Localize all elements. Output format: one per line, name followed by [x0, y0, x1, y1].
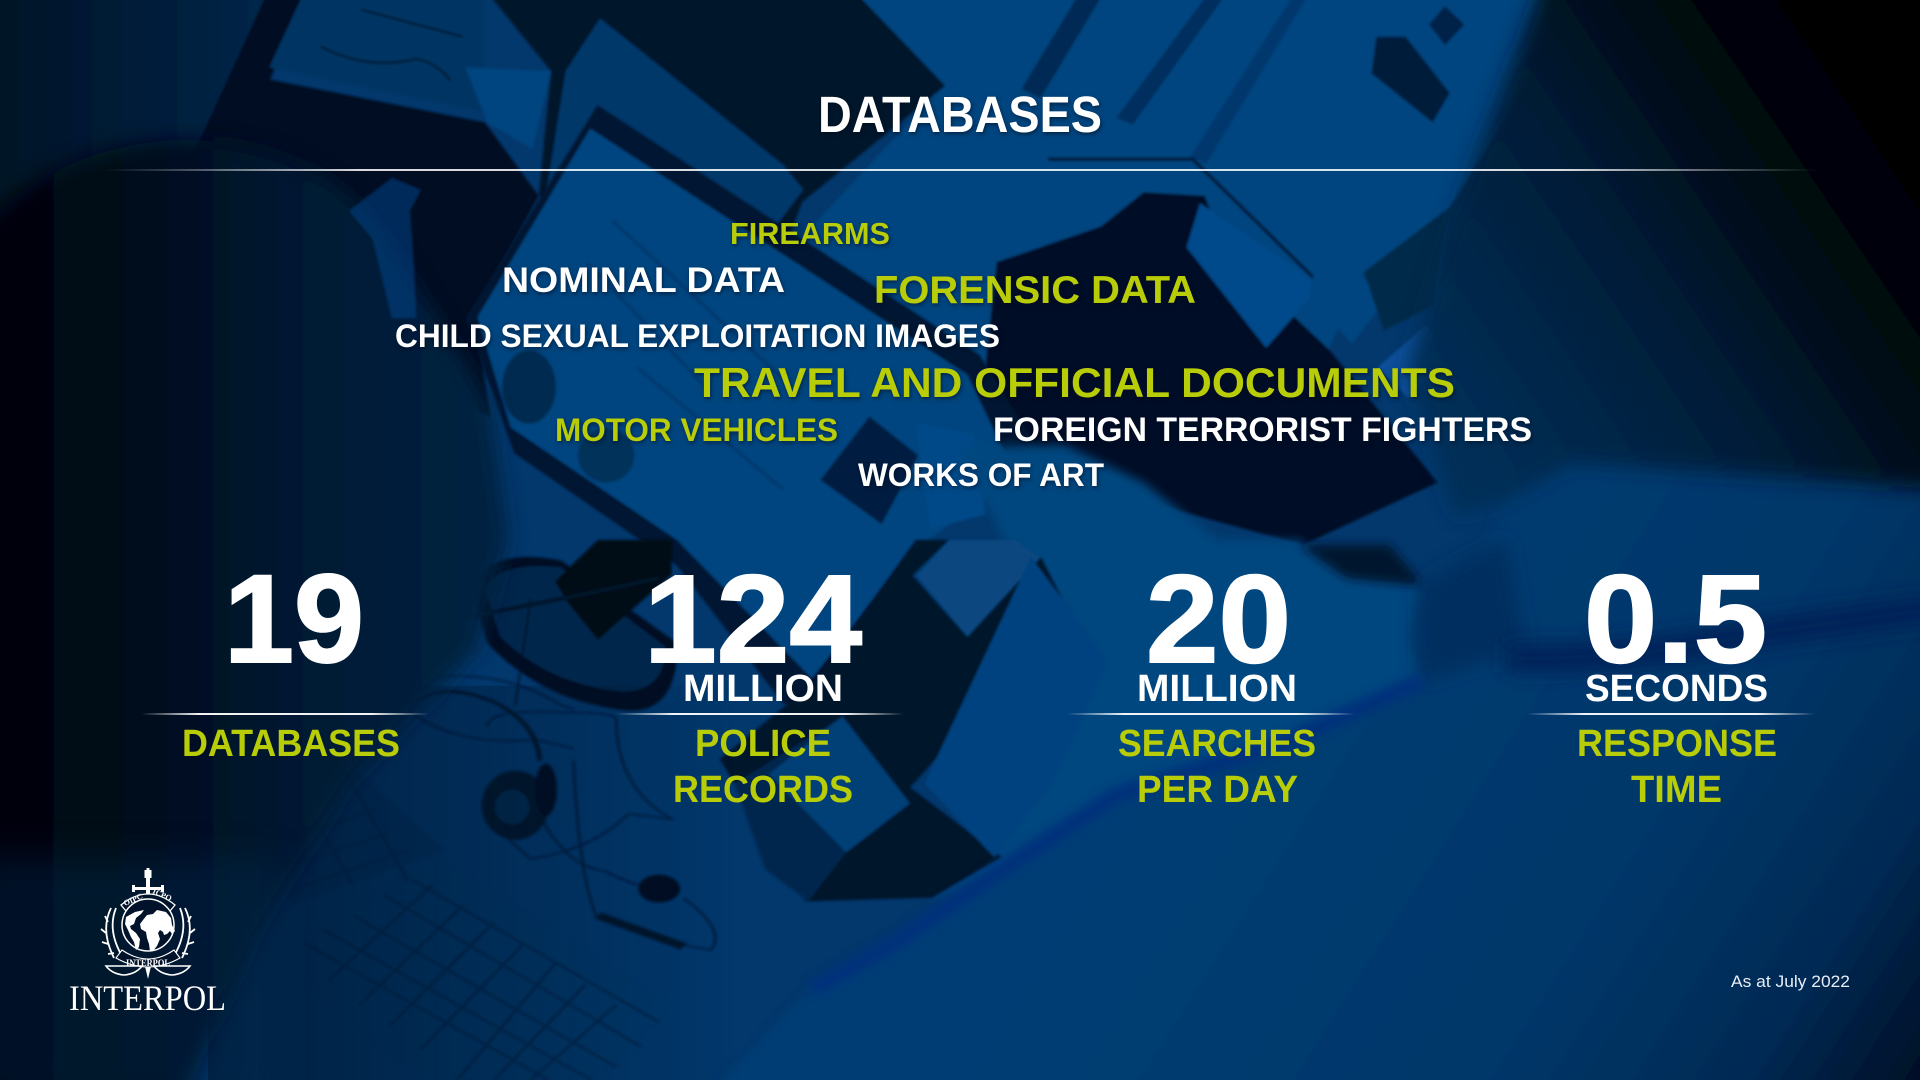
- word: works of art: WORKS OF ART: [858, 457, 1104, 493]
- INTERPOL logo: [69, 868, 226, 1018]
- stat: 124 million police records: [616, 550, 904, 811]
- number: 0.5: [1584, 550, 1767, 689]
- icon: emblem: [101, 868, 195, 979]
- scales: [106, 966, 190, 975]
- icon: emblem: ICPO: [151, 887, 173, 903]
- label: [1577, 723, 1777, 811]
- unit: SECONDS: [1585, 668, 1768, 710]
- banner bottom: [116, 950, 180, 967]
- number: 20: [1146, 550, 1291, 689]
- word: child sexual exploitation images: CHILD SEXUAL EXPLOITATION IMAGES: [395, 318, 1000, 354]
- icon: emblem: INTERPOL: [126, 958, 170, 968]
- word: firearms: FIREARMS: [730, 216, 890, 251]
- rule: [1527, 713, 1815, 715]
- banner top: [121, 894, 175, 911]
- label: RECORDS: [673, 769, 853, 811]
- background: blurred person hair at left: [0, 140, 508, 1080]
- sword: [132, 868, 164, 895]
- background: water bottle: [349, 178, 421, 318]
- wordmark: INTERPOL: [69, 978, 226, 1018]
- rule: [616, 713, 904, 715]
- title: DATABASES: [818, 86, 1102, 143]
- laurel: [101, 908, 195, 958]
- person at far desk: [980, 192, 1438, 545]
- stat: 20 million searches per day: [1067, 550, 1355, 811]
- globe: [122, 899, 174, 951]
- unit: MILLION: [1137, 668, 1297, 710]
- background: main monitor with photo records: [465, 105, 1041, 704]
- label: POLICE: [695, 723, 831, 765]
- background: dark corner behind hand: [1299, 545, 1423, 585]
- stat: 0.5 seconds response time: [1527, 550, 1815, 811]
- date note: As at July 2022: [1731, 972, 1850, 991]
- background: desk shading: [208, 686, 735, 1080]
- background: lanyard strap: [812, 681, 1422, 989]
- background: desk equipment and keyboards: [267, 540, 1108, 1080]
- word: nominal data: NOMINAL DATA: [502, 261, 785, 300]
- label: SEARCHES: [1118, 723, 1316, 765]
- background: wrist and cuff: [1422, 539, 1525, 681]
- number: 19: [224, 550, 364, 689]
- label: TIME: [1631, 769, 1722, 811]
- title divider: [104, 169, 1818, 171]
- label: [1118, 723, 1316, 811]
- label: RESPONSE: [1577, 723, 1777, 765]
- word: travel and official documents: TRAVEL AND OFFICIAL DOCUMENTS: [694, 359, 1455, 406]
- word: motor vehicles: MOTOR VEHICLES: [555, 412, 838, 448]
- background: monitors and desks in the distance: [0, 0, 1545, 545]
- database word cloud: [395, 216, 1532, 493]
- background: blurred foreground sleeve: [704, 462, 1920, 1080]
- rule: [141, 713, 429, 715]
- number: 124: [644, 550, 862, 689]
- word: foreign terrorist fighters: FOREIGN TERRORIST FIGHTERS: [993, 411, 1532, 449]
- label: [673, 723, 853, 811]
- unit: MILLION: [683, 668, 843, 710]
- word: forensic data: FORENSIC DATA: [874, 269, 1196, 312]
- background: blurred person head at right: [1408, 0, 1920, 514]
- background: blurred hand: [931, 444, 1422, 900]
- rule: [1067, 713, 1355, 715]
- stat: 19 databases: [141, 550, 429, 765]
- label: PER DAY: [1137, 769, 1298, 811]
- icon: emblem: OIPC: [122, 891, 144, 908]
- label: DATABASES: [182, 723, 400, 765]
